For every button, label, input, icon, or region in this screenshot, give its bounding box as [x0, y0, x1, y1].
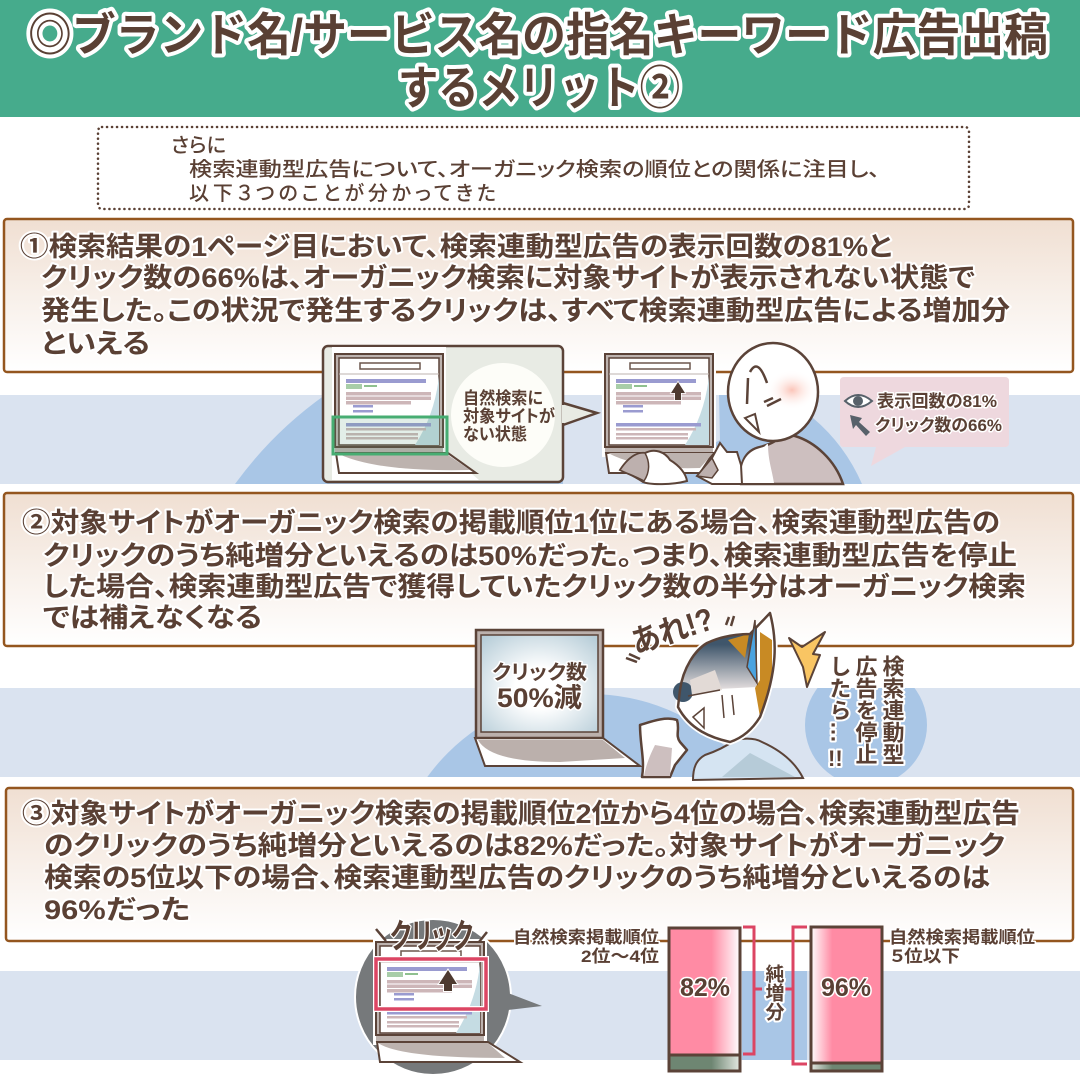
callout text: ない状態 [463, 425, 527, 444]
title: ◎ブランド名/サービス名の指名キーワード広告出稿 [28, 9, 1048, 61]
panel 3 text [22, 798, 1020, 925]
callout text: 自然検索に [463, 388, 543, 408]
panel 1 [4, 219, 1073, 372]
pink stats callout: クリック数の66% [875, 416, 1002, 435]
head [673, 613, 775, 742]
panel 2 text: ②対象サイトがオーガニック検索の掲載順位1位にある場合、検索連動型広告の [22, 507, 1000, 538]
panel 2 [4, 493, 1073, 646]
panel 1 text: クリック数の66%は、オーガニック検索に対象サイトが表示されない状態で [41, 262, 975, 293]
panel 3 text: のクリックのうち純増分といえるのは82%だった。対象サイトがオーガニック [44, 830, 1005, 861]
pink stats callout: 表示回数の81% [877, 392, 997, 411]
intro text box: 以下３つのことが分かってきた [189, 182, 496, 205]
panel 2 text: した場合、検索連動型広告で獲得していたクリック数の半分はオーガニック検索 [43, 572, 1026, 602]
vertical text: 検索連動型 [880, 655, 904, 765]
bar: 96% [811, 927, 882, 1071]
panel 1 text: ①検索結果の1ページ目において、検索連動型広告の表示回数の81%と [20, 232, 892, 262]
panel 2 text: では補えなくなる [43, 603, 262, 633]
panel 2 text: クリックのうち純増分といえるのは50%だった。つまり、検索連動型広告を停止 [43, 541, 1017, 571]
bar: 82%: 82% [680, 974, 730, 1002]
callout text [463, 388, 555, 444]
label: rank 5 or lower: 自然検索掲載順位 [889, 927, 1035, 947]
panel 2 text [22, 507, 1026, 633]
icon: eye [845, 395, 872, 407]
band 3 background [0, 971, 1080, 1060]
intro text box: さらに [171, 135, 226, 157]
head [728, 343, 818, 441]
label: rank 5 or lower [889, 927, 1035, 966]
pink stats callout [840, 377, 1009, 466]
icon: yellow spark [789, 632, 825, 687]
panel 3 [6, 788, 1073, 941]
click text: クリック [390, 918, 473, 956]
label: rank 2 to 4: 自然検索掲載順位 [513, 927, 659, 947]
illustration: person at laptop [602, 343, 843, 484]
illustration: search result callout [323, 346, 597, 482]
illustration: clicked laptop [355, 918, 542, 1075]
panel 1 text: といえる [41, 329, 150, 359]
panel 1 text: 発生した。この状況で発生するクリックは、すべて検索連動型広告による増加分 [41, 296, 1010, 326]
illustration: laptop click count down: クリック数 [492, 661, 587, 684]
illustration: laptop click count down: 50%減 [497, 683, 582, 713]
label: rank 2 to 4 [513, 927, 659, 966]
panel 3 text: 96%だった [44, 895, 190, 925]
body [740, 434, 843, 484]
label: rank 2 to 4: 2位～4位 [581, 947, 659, 966]
label: net increase: 純増分 [762, 964, 784, 1022]
bar: 82% [669, 928, 740, 1071]
shirt [693, 739, 803, 780]
header banner [0, 0, 1080, 117]
panel 3 text: ③対象サイトがオーガニック検索の掲載順位2位から4位の場合、検索連動型広告 [22, 798, 1020, 829]
callout text: 対象サイトが [463, 406, 555, 426]
hand [640, 719, 687, 777]
icon: cursor [850, 415, 870, 436]
bar: 96%: 96% [821, 974, 871, 1002]
illustration: laptop click count down [475, 630, 640, 766]
band 2 background [0, 688, 1080, 777]
vertical text: !! [828, 746, 843, 771]
vertical text: 広告を停止 [852, 655, 878, 765]
panel 1 text [20, 232, 1010, 359]
title [28, 9, 1048, 114]
panel 3 text: 検索の5位以下の場合、検索連動型広告のクリックのうち純増分といえるのは [44, 863, 990, 893]
intro text box: 検索連動型広告について、オーガニック検索の順位との関係に注目し、 [189, 158, 880, 181]
hands [620, 451, 687, 484]
label: rank 5 or lower: ５位以下 [890, 947, 960, 966]
band 1 background [0, 395, 1080, 484]
exclamation: are!?: あれ!? [627, 600, 718, 661]
illustration: surprised person [626, 600, 803, 780]
vertical text [826, 655, 904, 771]
bracket: net increase [743, 927, 807, 1064]
vertical text: したら… [826, 655, 852, 743]
title: するメリット② [398, 62, 680, 114]
intro text box [98, 127, 969, 209]
